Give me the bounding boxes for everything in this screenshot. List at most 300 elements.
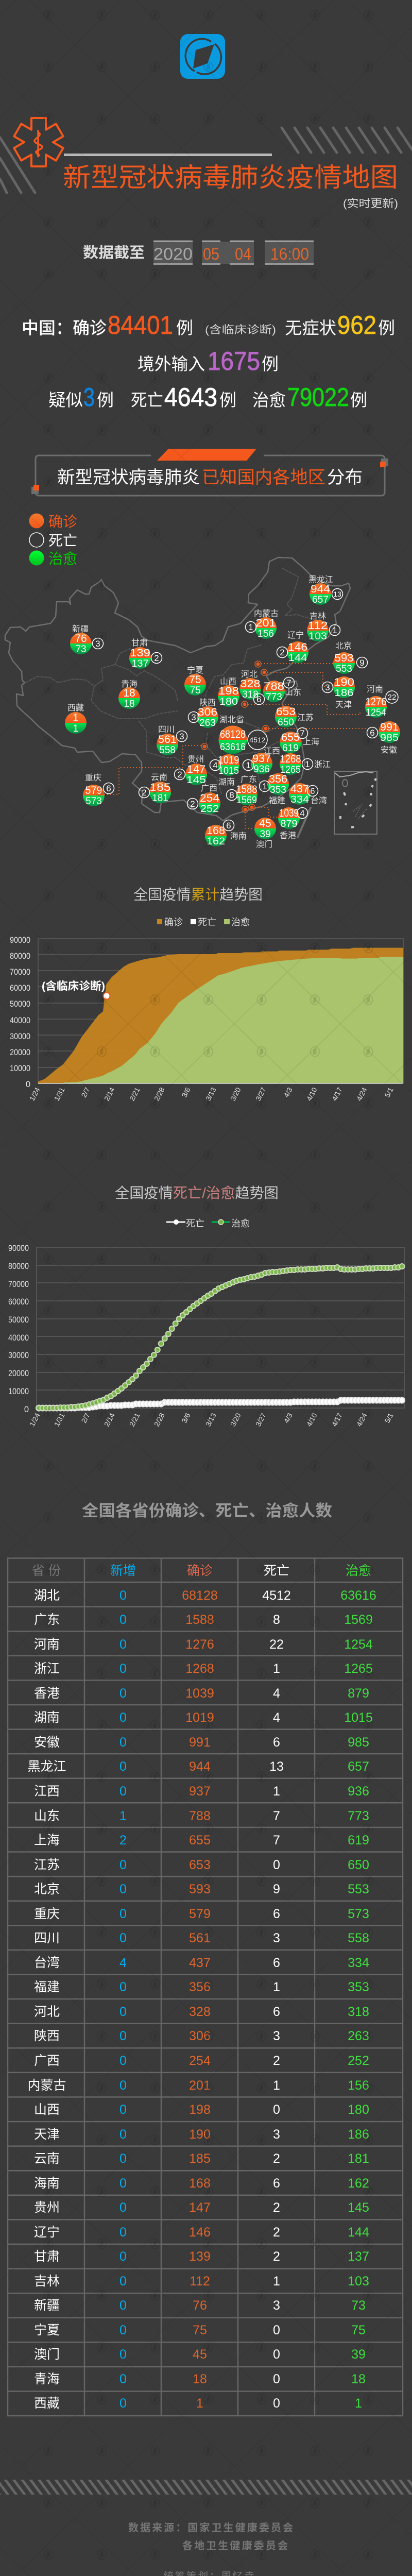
row: 内蒙古: 201 xyxy=(189,2078,211,2093)
row: 香港 xyxy=(34,1686,369,1701)
row: 新疆 xyxy=(34,2298,366,2313)
area chart: cumulative: 90000 xyxy=(10,936,30,945)
row: 河南 xyxy=(34,1637,373,1652)
area chart: cumulative: 4/17 xyxy=(330,1086,344,1102)
row: 四川: 0 xyxy=(119,1931,127,1945)
bubble: 海南: 168 xyxy=(207,825,225,837)
row: 山西: 198 xyxy=(189,2103,211,2117)
bubble: 澳门: 39 xyxy=(260,829,271,840)
map legend: 死亡 xyxy=(48,533,77,549)
bubble: 福建: 356 xyxy=(269,773,287,785)
bubble: 新疆: 73 xyxy=(75,644,87,655)
row: 辽宁: 144 xyxy=(348,2225,369,2240)
summary stats: 4643 xyxy=(164,383,217,412)
summary stats: 例 xyxy=(262,354,279,374)
row: 云南: 181 xyxy=(348,2151,369,2166)
bubble: 重庆: 579 xyxy=(85,785,102,796)
row: 河北: 6 xyxy=(273,2005,280,2019)
row: 河南: 22 xyxy=(269,1637,284,1652)
bubble: 江苏: 650 xyxy=(278,717,294,728)
inset: South China Sea xyxy=(334,771,377,834)
row: 四川: 561 xyxy=(189,1931,211,1945)
bubble: 广东: 1588 xyxy=(236,784,258,795)
table header: 新增 xyxy=(110,1564,136,1578)
row: 云南: 0 xyxy=(119,2151,127,2166)
area chart: cumulative: 2/28 xyxy=(152,1086,166,1102)
row: 台湾: 6 xyxy=(273,1956,280,1970)
summary stats: (含临床诊断) xyxy=(205,324,276,336)
data date line: 04 xyxy=(235,245,251,263)
map legend xyxy=(29,513,77,567)
row: 贵州: 145 xyxy=(348,2200,369,2215)
bubble: 西藏: 1 xyxy=(73,723,78,734)
row: 海南: 162 xyxy=(348,2176,369,2191)
row: 海南: 海南 xyxy=(34,2176,60,2191)
bubble: 河南: 河南 xyxy=(367,685,383,694)
bubble: 四川 xyxy=(157,725,187,756)
bubble: 山西: 198 xyxy=(218,685,239,697)
area chart: cumulative: 3/13 xyxy=(204,1086,218,1102)
summary stats: 死亡 xyxy=(131,391,163,410)
bubble: 甘肃: 甘肃 xyxy=(131,638,148,648)
bubble: 贵州: 2 xyxy=(177,770,182,779)
summary stats: 例 xyxy=(176,318,193,337)
area chart: cumulative: 60000 xyxy=(10,984,30,993)
bubble: 河北: 328 xyxy=(240,678,261,690)
row: 辽宁 xyxy=(34,2225,369,2240)
bubble: 天津: 3 xyxy=(325,683,330,692)
bubble: 贵州: 145 xyxy=(186,775,206,786)
area chart: cumulative: 70000 xyxy=(10,968,30,977)
row: 澳门 xyxy=(34,2347,366,2362)
chart legend: cumulative: 死亡 xyxy=(198,917,216,927)
bubble: 天津 xyxy=(322,676,355,709)
row: 陕西: 3 xyxy=(273,2029,280,2043)
row: 台湾: 334 xyxy=(348,1956,369,1970)
data date line xyxy=(83,241,314,264)
line chart: death and cured: 70000 xyxy=(8,1280,29,1289)
row: 香港: 香港 xyxy=(34,1686,60,1701)
row: 福建: 福建 xyxy=(34,1980,60,1994)
row: 山东: 773 xyxy=(348,1809,369,1823)
credits: data source: 各地卫生健康委员会 xyxy=(182,2539,288,2552)
bubble: 吉林: 103 xyxy=(308,631,327,642)
row: 云南 xyxy=(34,2151,369,2166)
bubble: 广东: 1569 xyxy=(236,795,257,806)
row: 西藏: 0 xyxy=(273,2396,280,2411)
row: 浙江: 1268 xyxy=(185,1662,214,1676)
row: 贵州: 0 xyxy=(119,2200,127,2215)
summary stats: 例 xyxy=(219,391,236,410)
bubble: 北京 xyxy=(333,641,368,674)
bubble: 广西: 2 xyxy=(190,799,195,809)
summary stats: 1675 xyxy=(208,347,260,376)
bubble: 湖北: 湖北省 xyxy=(219,715,244,724)
row: 河南: 河南 xyxy=(34,1637,60,1652)
bubble: 宁夏: 宁夏 xyxy=(187,666,203,675)
bubble: 重庆: 重庆 xyxy=(85,773,101,783)
row: 台湾: 台湾 xyxy=(34,1956,60,1970)
row: 香港: 1039 xyxy=(185,1686,214,1701)
row: 山东: 788 xyxy=(189,1809,211,1823)
area chart: cumulative: 30000 xyxy=(10,1032,30,1041)
bubble: 陕西: 263 xyxy=(199,718,216,728)
bubble: 香港: 879 xyxy=(280,819,298,829)
row: 上海: 655 xyxy=(189,1833,211,1848)
row: 山西: 山西 xyxy=(34,2103,60,2117)
row: 贵州 xyxy=(34,2200,369,2215)
bubble: 吉林 xyxy=(307,612,340,642)
row: 重庆: 573 xyxy=(348,1907,369,1921)
icon: star of life xyxy=(14,118,63,166)
bubble: 安徽: 6 xyxy=(370,728,375,738)
bubble: 四川: 561 xyxy=(158,734,177,745)
row: 宁夏 xyxy=(34,2323,366,2337)
bubble: 青海: 青海 xyxy=(121,680,138,689)
area chart: cumulative: 0 xyxy=(26,1080,30,1089)
row: 上海: 619 xyxy=(348,1833,369,1848)
bubble: 澳门 xyxy=(254,818,276,849)
line chart: death and cured: 4/3 xyxy=(282,1412,294,1425)
row: 山东: 1 xyxy=(119,1809,127,1823)
bubble: 云南: 185 xyxy=(149,782,171,793)
bubble: 河南: 22 xyxy=(388,693,396,702)
row: 天津: 186 xyxy=(348,2127,369,2142)
row: 上海: 2 xyxy=(119,1833,127,1848)
row: 甘肃: 2 xyxy=(273,2249,280,2264)
title: 新型冠状病毒肺炎疫情地图 xyxy=(63,163,398,192)
chart legend: cumulative: 治愈 xyxy=(231,917,250,927)
row: 香港: 879 xyxy=(348,1686,369,1701)
bubble: 海南: 海南 xyxy=(230,832,247,841)
row: 广西: 广西 xyxy=(34,2054,60,2068)
row: 湖南: 1015 xyxy=(344,1710,373,1725)
row: 西藏: 0 xyxy=(119,2396,127,2411)
row: 宁夏: 75 xyxy=(193,2323,207,2337)
row: 澳门: 39 xyxy=(351,2347,366,2362)
row: 甘肃 xyxy=(34,2249,369,2264)
data date line: 16:00 xyxy=(270,245,309,263)
line chart: death and cured: 10000 xyxy=(8,1387,29,1396)
row: 黑龙江: 944 xyxy=(189,1759,211,1774)
bubble: 江西 xyxy=(243,747,280,775)
line chart: death and cured xyxy=(8,1244,404,1428)
row: 吉林: 0 xyxy=(119,2274,127,2289)
row: 湖南: 4 xyxy=(273,1710,280,1725)
row: 内蒙古: 156 xyxy=(348,2078,369,2093)
bubble: 贵州: 147 xyxy=(187,764,205,775)
heading: cumulative chart: 全国疫情累计趋势图 xyxy=(133,887,263,903)
row: 福建 xyxy=(34,1980,369,1994)
bubble: 江苏: 653 xyxy=(276,706,296,718)
line chart: death and cured: 3/20 xyxy=(229,1412,243,1428)
row: 甘肃: 137 xyxy=(348,2249,369,2264)
bubble: 内蒙古: 156 xyxy=(258,629,274,639)
bubble: 湖北: 4512 xyxy=(249,736,266,744)
table: provinces xyxy=(8,1558,403,2416)
line chart: death and cured: 3/6 xyxy=(180,1412,192,1425)
area chart: cumulative: 20000 xyxy=(10,1048,30,1057)
row: 山东 xyxy=(34,1809,369,1823)
row: 青海: 0 xyxy=(273,2372,280,2386)
bubble: 云南: 2 xyxy=(142,788,147,798)
row: 江西 xyxy=(34,1784,369,1799)
row: 西藏: 1 xyxy=(355,2396,362,2411)
summary stats xyxy=(22,311,395,412)
bubble: 上海 xyxy=(280,727,319,754)
bubble: 山东: 7 xyxy=(286,678,291,688)
area chart: cumulative: 5/1 xyxy=(383,1086,395,1099)
row: 江西: 936 xyxy=(348,1784,369,1799)
row: 河南: 0 xyxy=(119,1637,127,1652)
line chart: death and cured: 30000 xyxy=(8,1351,29,1360)
row: 安徽: 6 xyxy=(273,1735,280,1750)
row: 山东: 山东 xyxy=(34,1809,60,1823)
bubble: 北京: 北京 xyxy=(335,641,352,651)
row: 江苏: 0 xyxy=(273,1858,280,1872)
row: 贵州: 贵州 xyxy=(34,2200,60,2215)
row: 浙江: 0 xyxy=(119,1662,127,1676)
summary stats: 无症状 xyxy=(285,318,336,337)
title rule xyxy=(64,154,272,156)
bubble: 广西: 254 xyxy=(200,792,219,804)
row: 江苏: 0 xyxy=(119,1858,127,1872)
bubble: 内蒙古: 201 xyxy=(255,617,276,629)
row: 安徽: 985 xyxy=(348,1735,369,1750)
bubble: 江苏 xyxy=(275,706,314,728)
row: 湖南: 0 xyxy=(119,1710,127,1725)
row: 吉林 xyxy=(34,2274,369,2289)
row: 贵州: 2 xyxy=(273,2200,280,2215)
bubble: 新疆: 76 xyxy=(75,633,87,645)
row: 浙江: 1 xyxy=(273,1662,280,1676)
bubble: 宁夏: 75 xyxy=(190,685,201,696)
area chart: cumulative: 4/3 xyxy=(282,1086,294,1099)
summary stats: 例 xyxy=(378,318,395,337)
row: 江苏 xyxy=(34,1858,369,1872)
row: 海南: 168 xyxy=(189,2176,211,2191)
credits: data source: 数据来源：国家卫生健康委员会 xyxy=(128,2521,293,2534)
data date line: 05 xyxy=(203,245,219,263)
bubble: 重庆: 6 xyxy=(106,784,111,793)
row: 甘肃: 0 xyxy=(119,2249,127,2264)
row: 青海 xyxy=(34,2372,366,2386)
data date line: 2020 xyxy=(153,245,193,263)
row: 陕西: 陕西 xyxy=(34,2029,60,2043)
row: 福建: 353 xyxy=(348,1980,369,1994)
bubble: 黑龙江: 944 xyxy=(311,583,330,595)
bubble: 天津: 天津 xyxy=(335,700,352,709)
row: 青海: 18 xyxy=(351,2372,366,2386)
bubble: 江西: 江西 xyxy=(264,747,280,756)
row: 湖北: 湖北 xyxy=(34,1588,60,1603)
row: 四川: 四川 xyxy=(34,1931,60,1945)
row: 广东: 1569 xyxy=(344,1613,373,1627)
bubble: 香港: 1039 xyxy=(279,807,299,819)
bubble: 福建: 1 xyxy=(262,782,267,791)
row: 江苏: 江苏 xyxy=(34,1858,60,1872)
row: 湖南 xyxy=(34,1710,373,1725)
row: 北京: 593 xyxy=(189,1882,211,1896)
bubble: 浙江 xyxy=(280,753,331,775)
area chart: cumulative: 3/27 xyxy=(254,1086,268,1102)
bubble: 台湾 xyxy=(289,783,327,805)
line chart: death and cured: 5/1 xyxy=(383,1412,395,1425)
row: 山西 xyxy=(34,2103,369,2117)
row: 内蒙古 xyxy=(27,2078,369,2093)
row: 浙江: 1265 xyxy=(344,1662,373,1676)
bubble: 西藏: 西藏 xyxy=(67,703,84,713)
bubble: 广西: 252 xyxy=(200,804,219,815)
row: 台湾: 4 xyxy=(119,1956,127,1970)
area chart: cumulative: 40000 xyxy=(10,1016,30,1025)
bubble: 宁夏: 75 xyxy=(189,674,201,686)
area chart: cumulative: 2/21 xyxy=(128,1086,142,1102)
decorative header stripes xyxy=(0,128,412,193)
row: 新疆: 新疆 xyxy=(34,2298,60,2313)
bubble: 安徽: 安徽 xyxy=(381,745,397,755)
row: 天津: 天津 xyxy=(34,2127,60,2142)
line chart: death and cured: 1/24 xyxy=(28,1412,42,1428)
area chart: cumulative: 80000 xyxy=(10,952,30,961)
line chart: death and cured: 60000 xyxy=(8,1297,29,1307)
bubble: 新疆 xyxy=(70,624,103,655)
row: 北京: 9 xyxy=(273,1882,280,1896)
chart legend: death and cured: 治愈 xyxy=(231,1218,250,1229)
row: 宁夏: 75 xyxy=(351,2323,366,2337)
area chart: cumulative: 10000 xyxy=(10,1064,30,1073)
bubble: 黑龙江: 657 xyxy=(312,595,329,605)
line chart: death and cured: 3/27 xyxy=(254,1412,268,1428)
area chart: cumulative: 2/7 xyxy=(79,1086,92,1099)
row: 辽宁: 0 xyxy=(119,2225,127,2240)
row: 安徽: 安徽 xyxy=(34,1735,60,1750)
bubble: 澳门: 澳门 xyxy=(256,840,272,849)
bubble: 贵州: 贵州 xyxy=(187,755,204,764)
chart legend: cumulative: 确诊 xyxy=(164,917,183,927)
line chart: death and cured: 4/10 xyxy=(305,1412,319,1428)
bubble: 云南: 云南 xyxy=(151,773,167,782)
bubble: 甘肃: 137 xyxy=(132,658,148,669)
bubble: 河北: 河北 xyxy=(241,670,258,679)
row: 澳门: 澳门 xyxy=(34,2347,60,2362)
row: 山东: 7 xyxy=(273,1809,280,1823)
row: 海南: 6 xyxy=(273,2176,280,2191)
summary stats: 治愈 xyxy=(252,391,286,410)
row: 香港: 4 xyxy=(273,1686,280,1701)
row: 河北: 0 xyxy=(119,2005,127,2019)
area chart: cumulative: 1/24 xyxy=(28,1086,42,1102)
row: 天津: 3 xyxy=(273,2127,280,2142)
row: 山西: 0 xyxy=(273,2103,280,2117)
bubble: 甘肃: 2 xyxy=(154,653,159,663)
map: China outline xyxy=(5,557,350,837)
row: 江西: 0 xyxy=(119,1784,127,1799)
summary stats: 境外输入 xyxy=(138,354,205,374)
chart legend: cumulative xyxy=(157,917,250,927)
line chart: death and cured: 2/7 xyxy=(79,1412,92,1425)
bubble: 陕西: 3 xyxy=(191,713,196,722)
row: 浙江 xyxy=(34,1662,373,1676)
row: 贵州: 147 xyxy=(189,2200,211,2215)
area chart: cumulative: 2/14 xyxy=(102,1086,116,1102)
row: 湖北: 0 xyxy=(119,1588,127,1603)
row: 海南 xyxy=(34,2176,369,2191)
bubble: 福建 xyxy=(260,773,289,805)
row: 青海: 0 xyxy=(119,2372,127,2386)
row: 新疆: 76 xyxy=(193,2298,207,2313)
row: 山西: 0 xyxy=(119,2103,127,2117)
bubble: 上海: 619 xyxy=(282,743,299,754)
row: 青海: 青海 xyxy=(34,2372,60,2386)
row: 天津 xyxy=(34,2127,369,2142)
bubble: 安徽 xyxy=(367,721,400,755)
row: 宁夏: 宁夏 xyxy=(34,2323,60,2337)
bubble: 内蒙古: 1 xyxy=(248,622,253,632)
bubble: 河南: 1276 xyxy=(366,696,386,708)
summary stats: 例 xyxy=(350,391,367,410)
bubble: 湖南 xyxy=(210,754,239,787)
bubble: 吉林: 112 xyxy=(308,620,328,632)
bubble: 吉林: 吉林 xyxy=(310,612,326,621)
bubble: 广东: 广东 xyxy=(241,775,257,784)
heading: province table: 全国各省份确诊、死亡、治愈人数 xyxy=(82,1502,332,1520)
line chart: death and cured: 2/21 xyxy=(128,1412,142,1428)
table header: 确诊 xyxy=(187,1564,213,1578)
row: 安徽: 991 xyxy=(189,1735,211,1750)
row: 新疆: 73 xyxy=(351,2298,366,2313)
line chart: death and cured: 3/13 xyxy=(204,1412,218,1428)
chart legend: death and cured xyxy=(166,1218,250,1229)
row: 澳门: 45 xyxy=(193,2347,207,2362)
row: 辽宁: 辽宁 xyxy=(34,2225,60,2240)
row: 吉林: 112 xyxy=(190,2274,210,2289)
bubble: 内蒙古: 内蒙古 xyxy=(254,609,279,618)
bubble: 辽宁: 辽宁 xyxy=(287,631,304,640)
row: 福建: 1 xyxy=(273,1980,280,1994)
bubble: 湖北: 68128 xyxy=(220,728,246,740)
bubble: 河北 xyxy=(239,670,265,705)
bubble: 河南: 1254 xyxy=(366,707,386,718)
row: 陕西 xyxy=(34,2029,369,2043)
line chart: death and cured: 0 xyxy=(24,1405,29,1414)
row: 北京 xyxy=(34,1882,369,1896)
row: 宁夏: 0 xyxy=(119,2323,127,2337)
row: 广西: 252 xyxy=(348,2054,369,2068)
row: 河南: 1276 xyxy=(185,1637,214,1652)
panel: map section heading: 已知国内各地区 xyxy=(202,468,325,487)
heading: death and cured chart: 全国疫情死亡/治愈趋势图 xyxy=(115,1185,279,1201)
bubble: 安徽: 991 xyxy=(380,721,399,733)
bubble: 江西: 937 xyxy=(252,753,271,765)
row: 黑龙江 xyxy=(27,1759,369,1774)
bubble: 山西: 山西 xyxy=(220,677,236,686)
bubble: 上海: 上海 xyxy=(303,737,319,747)
bubble: 香港: 香港 xyxy=(280,831,296,840)
bubble: 重庆: 573 xyxy=(85,796,102,807)
row: 内蒙古: 1 xyxy=(273,2078,280,2093)
row: 黑龙江: 657 xyxy=(348,1759,369,1774)
bubble: 重庆 xyxy=(83,773,114,807)
row: 江西: 937 xyxy=(189,1784,211,1799)
bubble: 甘肃 xyxy=(129,638,162,669)
row: 广东: 1588 xyxy=(185,1613,214,1627)
summary stats: 3 xyxy=(83,383,95,412)
bubble: 台湾: 437 xyxy=(290,783,309,795)
row: 云南: 云南 xyxy=(34,2151,60,2166)
summary stats: 84401 xyxy=(108,311,173,340)
bubble: 香港 xyxy=(278,807,308,840)
